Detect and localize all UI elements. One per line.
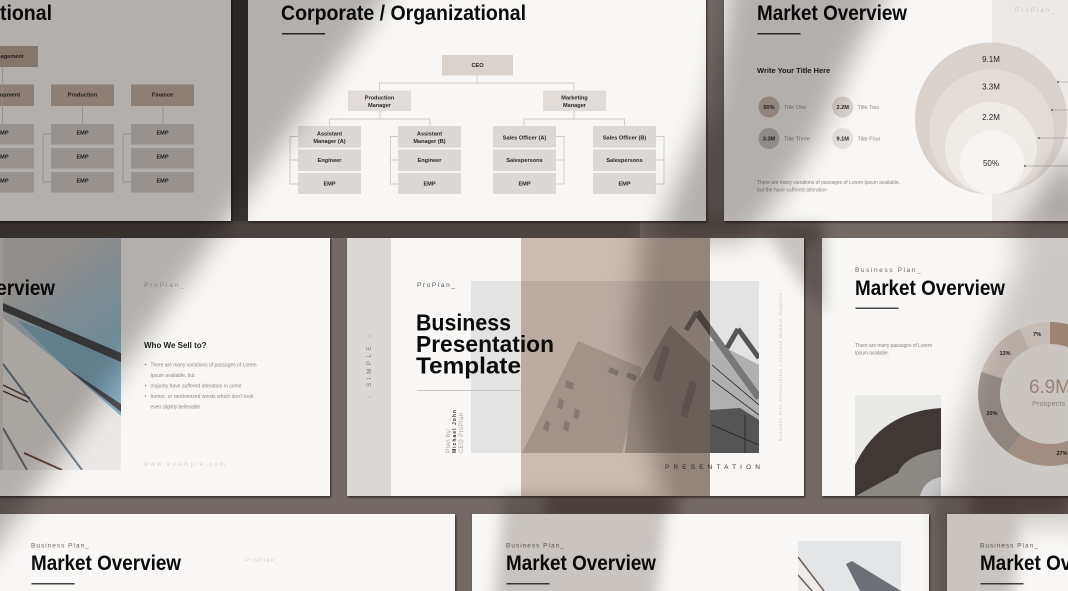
heading: Market Overview — [31, 552, 182, 575]
legend badges: Title Three — [784, 136, 810, 142]
panel: bottom left market overview slide — [0, 514, 455, 591]
paragraph — [757, 180, 900, 194]
eyebrow label: Business Plan_ — [506, 542, 565, 550]
org chart boxes: EMP — [618, 182, 631, 188]
brand label: ProPlan_ — [245, 557, 280, 564]
org chart boxes: Engineer — [418, 158, 442, 164]
org chart boxes: Salespersons — [506, 158, 543, 164]
org chart boxes: Manager (B) — [413, 139, 446, 145]
subheading: Write Your Title Here — [757, 66, 830, 75]
brand label: ProPlan_ — [417, 282, 457, 289]
photo: dark disc — [855, 395, 941, 496]
org chart boxes — [298, 55, 656, 194]
photo: glass building — [3, 238, 121, 470]
panel: organizational chart slide (cropped) — [0, 0, 231, 221]
legend badges: 50% — [763, 105, 775, 111]
heading: corporate organizational: Corporate / Organizational — [281, 2, 526, 25]
legend badges: 2.2M — [836, 105, 849, 111]
org chart boxes: EMP — [518, 182, 531, 188]
department boxes and employees: EMP — [76, 130, 89, 136]
org chart boxes: Production — [365, 96, 395, 102]
panel: corporate organizational chart slide — [248, 0, 706, 221]
nested circles chart: 3.3M — [982, 82, 1000, 92]
heading: Market Overview — [506, 552, 657, 575]
org chart boxes: Marketing — [561, 96, 588, 102]
org chart boxes: CEO — [471, 63, 484, 69]
donut chart: Prospects — [1032, 399, 1066, 408]
heading: market overview: Market Overview — [757, 2, 908, 25]
legend badges: Title Four — [858, 136, 881, 142]
heading: Market Overview — [855, 277, 1006, 300]
brand label: ProPlan_ — [144, 282, 186, 289]
donut chart: 13% — [999, 351, 1011, 357]
eyebrow label: Business Plan_ — [980, 542, 1039, 550]
nested circles chart — [915, 42, 1068, 194]
photo: building — [471, 281, 759, 453]
legend badges: Title Two — [858, 105, 879, 111]
eyebrow label: Business Plan_ — [855, 267, 922, 274]
nested circles chart: 50% — [983, 159, 999, 168]
org chart boxes: Engineer — [318, 158, 342, 164]
paragraph: There are many passages of Lorem — [855, 343, 932, 349]
presenter credits: Michael John — [452, 410, 458, 453]
photo: building corner — [798, 541, 901, 591]
org chart boxes: EMP — [423, 182, 436, 188]
paragraph — [855, 343, 932, 356]
main title: Presentation — [416, 331, 554, 357]
subheading: who we sell to: Who We Sell to? — [144, 341, 207, 350]
department boxes and employees: Finance — [152, 92, 173, 98]
presenter credits — [445, 410, 465, 453]
org chart boxes: Sales Officer (A) — [503, 136, 546, 142]
org chart boxes: Manager (A) — [313, 139, 346, 145]
panel: business presentation template cover — [347, 238, 804, 496]
org chart boxes: Manager — [368, 103, 392, 109]
bullet list: Ipsum available, but — [150, 373, 195, 379]
nested circles chart: 2.2M — [982, 113, 1000, 122]
website label: www.example.com — [143, 462, 227, 468]
department boxes and employees: EMP — [156, 178, 169, 184]
panel: market overview nested circles slide — [724, 0, 1068, 221]
bullet list: humor, or randomized words which don't look — [150, 394, 254, 400]
paragraph: but the have suffered alteration — [757, 188, 827, 194]
presenter credits: CEO ProPlan — [459, 413, 465, 453]
panel: who we sell to slide — [0, 238, 330, 496]
presentation label: PRESENTATION — [665, 464, 760, 471]
org chart connectors — [290, 76, 664, 184]
department boxes and employees: Production — [68, 92, 98, 98]
legend badges: 9.1M — [836, 136, 849, 142]
bullet list — [145, 362, 256, 410]
vertical caption: Business Plan Presentation | Creative Minimal Template — [778, 293, 783, 441]
org chart boxes: Assistant — [317, 132, 342, 138]
presenter credits: Plan by: — [445, 428, 452, 453]
main title — [416, 310, 554, 378]
department boxes and employees: EMP — [156, 130, 169, 136]
org chart boxes: EMP — [323, 182, 336, 188]
panel: bottom centre market overview slide — [472, 514, 929, 591]
bullet list: majority have suffered alteration in some — [150, 384, 242, 390]
nested circles chart: 9.1M — [982, 55, 1000, 64]
beige overlay panel — [521, 238, 710, 496]
department boxes and employees: EMP — [76, 154, 89, 160]
legend badges: 3.3M — [763, 136, 776, 142]
donut chart: 27% — [1056, 451, 1068, 457]
eyebrow label: Business Plan_ — [31, 542, 90, 550]
main title: Business — [416, 310, 511, 336]
donut chart — [978, 322, 1068, 466]
org chart boxes: Sales Officer (B) — [603, 136, 646, 142]
brand label: ProPlan_ — [1015, 7, 1057, 14]
panel: market overview donut slide — [822, 238, 1068, 496]
bullet list: There are many variations of passages of Lorem — [150, 362, 256, 368]
panel: bottom right market overview slide — [947, 514, 1068, 591]
bullet list: even slightly believable. — [150, 404, 202, 410]
paragraph: There are many variations of passages of Lorem Ipsum available, — [757, 180, 900, 186]
department boxes and employees — [0, 46, 194, 192]
org chart boxes: Salespersons — [606, 158, 643, 164]
donut chart: 20% — [986, 411, 998, 417]
main title: Template — [416, 352, 521, 378]
legend badges — [758, 96, 881, 149]
department boxes and employees: EMP — [156, 154, 169, 160]
org chart boxes: Manager — [563, 103, 587, 109]
legend badges: Title One — [784, 105, 806, 111]
vertical label: simple: - SIMPLE - — [367, 335, 373, 398]
donut chart: 7% — [1033, 332, 1041, 338]
paragraph: Ipsum available. — [855, 350, 889, 356]
department boxes and employees: EMP — [76, 178, 89, 184]
org chart boxes: Assistant — [417, 132, 442, 138]
